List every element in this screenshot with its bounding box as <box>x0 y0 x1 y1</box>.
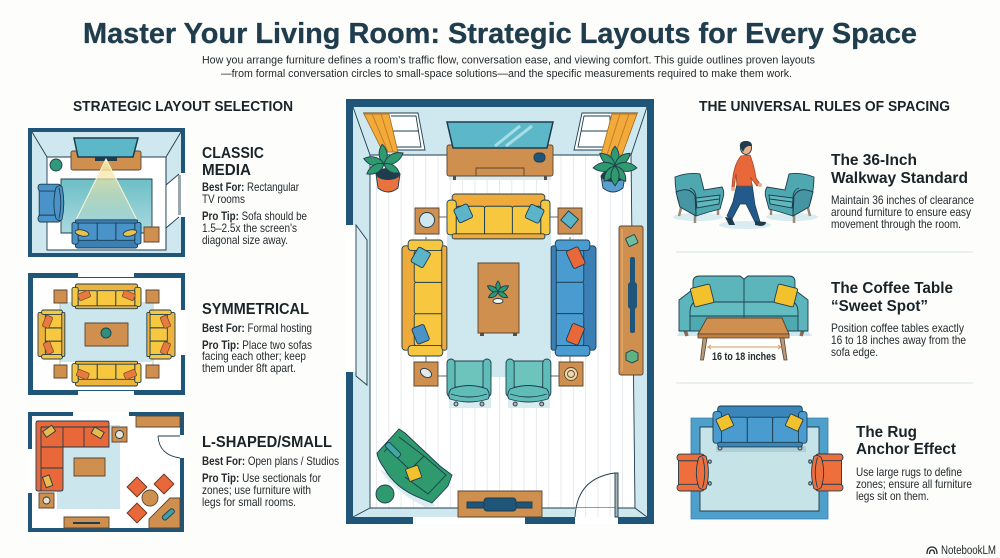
text: walkway <box>831 152 974 231</box>
intro paragraph: —from formal conversation circles to small-space solutions—and the specific measurements required to make them work. <box>221 68 792 80</box>
text: l-shaped small: Pro Tip: Use sectionals for <box>202 471 321 485</box>
measurement label: 16 to 18 inches <box>712 351 776 363</box>
panel: classic media <box>28 128 307 257</box>
text: walkway: around furniture to ensure easy <box>831 205 971 219</box>
text: l-shaped small: legs for small rooms. <box>202 495 296 509</box>
windows and curtains <box>363 113 638 155</box>
text: coffee table: “Sweet Spot” <box>831 298 928 315</box>
heading: strategic layout selection: STRATEGIC LAYOUT SELECTION <box>73 99 293 115</box>
panel: 36-inch walkway <box>673 141 974 231</box>
teal armchairs <box>447 359 551 408</box>
text: symmetrical <box>202 301 312 375</box>
text: l-shaped small <box>202 434 339 509</box>
floor plan: l-shaped small <box>28 412 184 532</box>
text: coffee table: Position coffee tables exactly <box>831 321 964 335</box>
text: rug anchor: The Rug <box>856 424 917 441</box>
media console and tv <box>447 122 553 180</box>
person walking <box>725 141 766 226</box>
illustration: walkway <box>673 141 818 229</box>
floor plan: symmetrical <box>28 273 185 395</box>
panel: symmetrical <box>28 273 312 395</box>
text: symmetrical: facing each other; keep <box>202 349 306 363</box>
panel: coffee table sweet spot <box>677 276 966 363</box>
right chair <box>765 173 814 223</box>
coffee table <box>478 263 519 336</box>
text: coffee table: 16 to 18 inches away from the <box>831 333 966 347</box>
bottom console <box>458 491 542 517</box>
text: coffee table <box>831 280 966 359</box>
text: coffee table: sofa edge. <box>831 345 878 359</box>
text: classic media: Pro Tip: Sofa should be <box>202 209 307 223</box>
round stool <box>376 485 394 503</box>
intro paragraph: How you arrange furniture defines a room's traffic flow, conversation ease, and viewing comfort. This guide outlines proven layouts <box>202 54 815 66</box>
text: classic media: diagonal size away. <box>202 233 288 247</box>
illustration: rug anchor <box>677 406 843 519</box>
text: walkway: Walkway Standard <box>831 170 968 187</box>
top sofa <box>447 194 550 239</box>
text: classic media: MEDIA <box>202 162 251 179</box>
text: classic media: CLASSIC <box>202 145 264 162</box>
text: classic media: 1.5–2.5x the screen's <box>202 221 297 235</box>
text: classic media: TV rooms <box>202 192 245 206</box>
text: walkway: movement through the room. <box>831 217 961 231</box>
side tables <box>414 208 583 386</box>
text: rug anchor: legs sit on them. <box>856 489 929 503</box>
green chaise lounge <box>377 429 452 507</box>
text: classic media <box>202 145 307 247</box>
center floor plan <box>346 99 654 524</box>
text: symmetrical: them under 8ft apart. <box>202 361 296 375</box>
plant right <box>593 146 637 192</box>
text: coffee table: The Coffee Table <box>831 280 953 297</box>
text: symmetrical: SYMMETRICAL <box>202 301 309 318</box>
text: rug anchor: Use large rugs to define <box>856 465 962 479</box>
text: walkway: Maintain 36 inches of clearance <box>831 193 974 207</box>
illustration: sofa and coffee table <box>677 276 812 360</box>
text: walkway: The 36-Inch <box>831 152 917 169</box>
panel: l-shaped small <box>28 412 339 532</box>
text: rug anchor: Anchor Effect <box>856 441 956 458</box>
left sofa <box>402 240 447 356</box>
text: l-shaped small: zones; use furniture with <box>202 483 311 497</box>
floor plan: classic media <box>28 128 185 257</box>
rug <box>447 230 551 377</box>
text: symmetrical: Best For: Formal hosting <box>202 321 312 335</box>
right console <box>619 226 643 375</box>
text: l-shaped small: Best For: Open plans / Studios <box>202 454 339 468</box>
title: Master Your Living Room: Strategic Layouts for Every Space <box>83 18 917 50</box>
heading: universal rules: THE UNIVERSAL RULES OF SPACING <box>699 99 950 115</box>
left chair <box>675 173 724 223</box>
text: l-shaped small: L-SHAPED/SMALL <box>202 434 332 451</box>
plant left <box>363 144 405 192</box>
text: symmetrical: Pro Tip: Place two sofas <box>202 338 312 352</box>
room shell <box>346 99 654 524</box>
text: rug anchor: zones; ensure all furniture <box>856 477 972 491</box>
intro paragraph <box>202 54 815 80</box>
text: rug anchor <box>856 424 972 503</box>
panel: rug anchor effect <box>677 406 972 519</box>
right sofa <box>551 240 596 356</box>
text: classic media: Best For: Rectangular <box>202 180 299 194</box>
